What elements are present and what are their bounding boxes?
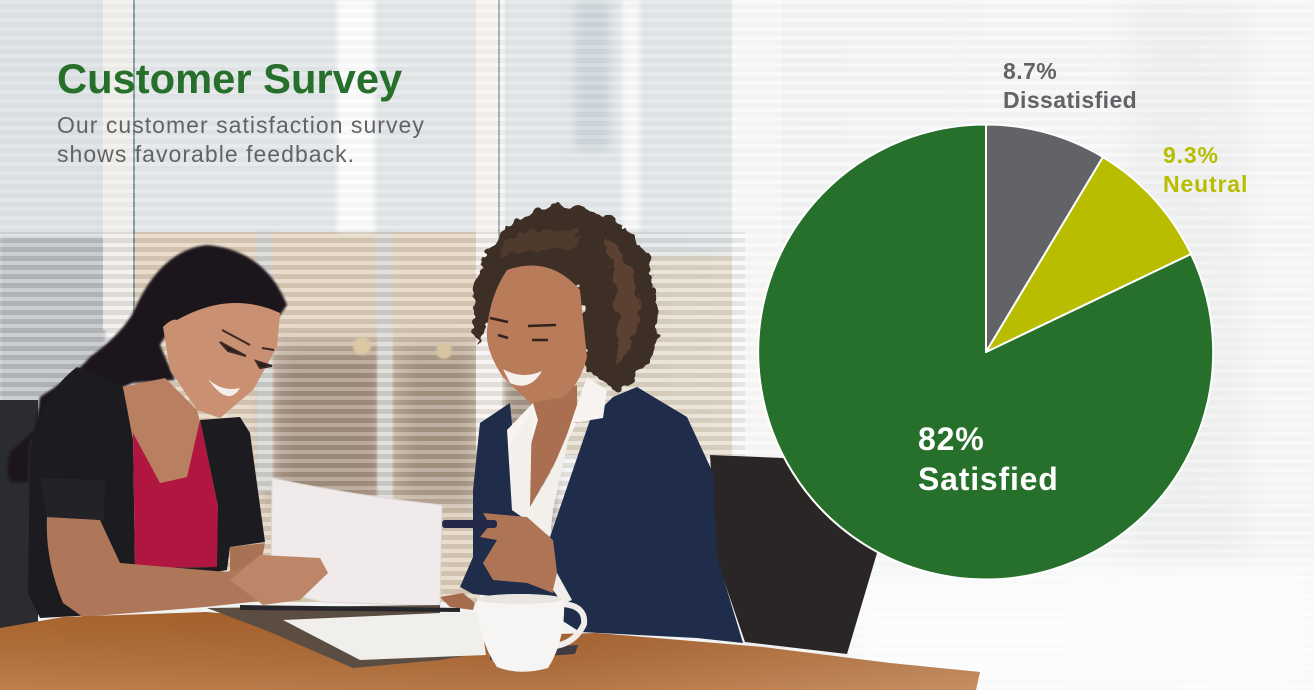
label: dissatisfied: Dissatisfied	[1003, 87, 1137, 113]
hand and pen	[480, 513, 558, 593]
smile	[208, 379, 240, 396]
face	[487, 266, 587, 403]
shirt cuff	[553, 573, 572, 604]
label: dissatisfied	[1003, 58, 1137, 113]
neck and chest	[123, 378, 200, 483]
label: neutral: Neutral	[1163, 171, 1248, 197]
subtitle: Our customer satisfaction survey	[57, 112, 425, 138]
subtitle	[57, 112, 425, 167]
slice: dissatisfied 8.7%	[986, 124, 1103, 352]
other hand	[440, 593, 475, 610]
blouse	[507, 377, 607, 537]
table	[0, 612, 980, 690]
right chair	[710, 455, 877, 654]
subtitle: shows favorable feedback.	[57, 141, 355, 167]
face	[163, 303, 280, 418]
red blouse	[133, 420, 218, 568]
cardigan cuff	[40, 478, 105, 520]
label: satisfied: Satisfied	[918, 461, 1059, 497]
back hair	[8, 245, 287, 482]
cardigan	[28, 367, 265, 618]
label: dissatisfied: 8.7%	[1003, 58, 1057, 84]
left chair	[0, 400, 38, 630]
label: neutral	[1163, 142, 1248, 197]
label: satisfied	[918, 421, 1059, 497]
hand holding paper	[230, 555, 328, 605]
arm skin	[47, 517, 270, 617]
neck and chest	[513, 385, 577, 507]
blazer	[460, 387, 743, 643]
title: Customer Survey	[57, 55, 402, 102]
right woman	[440, 205, 743, 643]
brows and eyes	[490, 318, 556, 340]
eyes and brows	[220, 330, 274, 368]
coffee cup	[477, 594, 584, 672]
pen	[442, 520, 497, 528]
slice: satisfied 82%	[758, 124, 1213, 579]
left woman	[8, 245, 287, 618]
smile	[503, 369, 542, 386]
label: satisfied: 82%	[918, 421, 984, 457]
label: neutral: 9.3%	[1163, 142, 1219, 168]
open notebook	[207, 605, 578, 668]
slice: neutral 9.3%	[986, 157, 1191, 352]
survey paper	[271, 478, 442, 606]
curly hair	[472, 205, 658, 390]
